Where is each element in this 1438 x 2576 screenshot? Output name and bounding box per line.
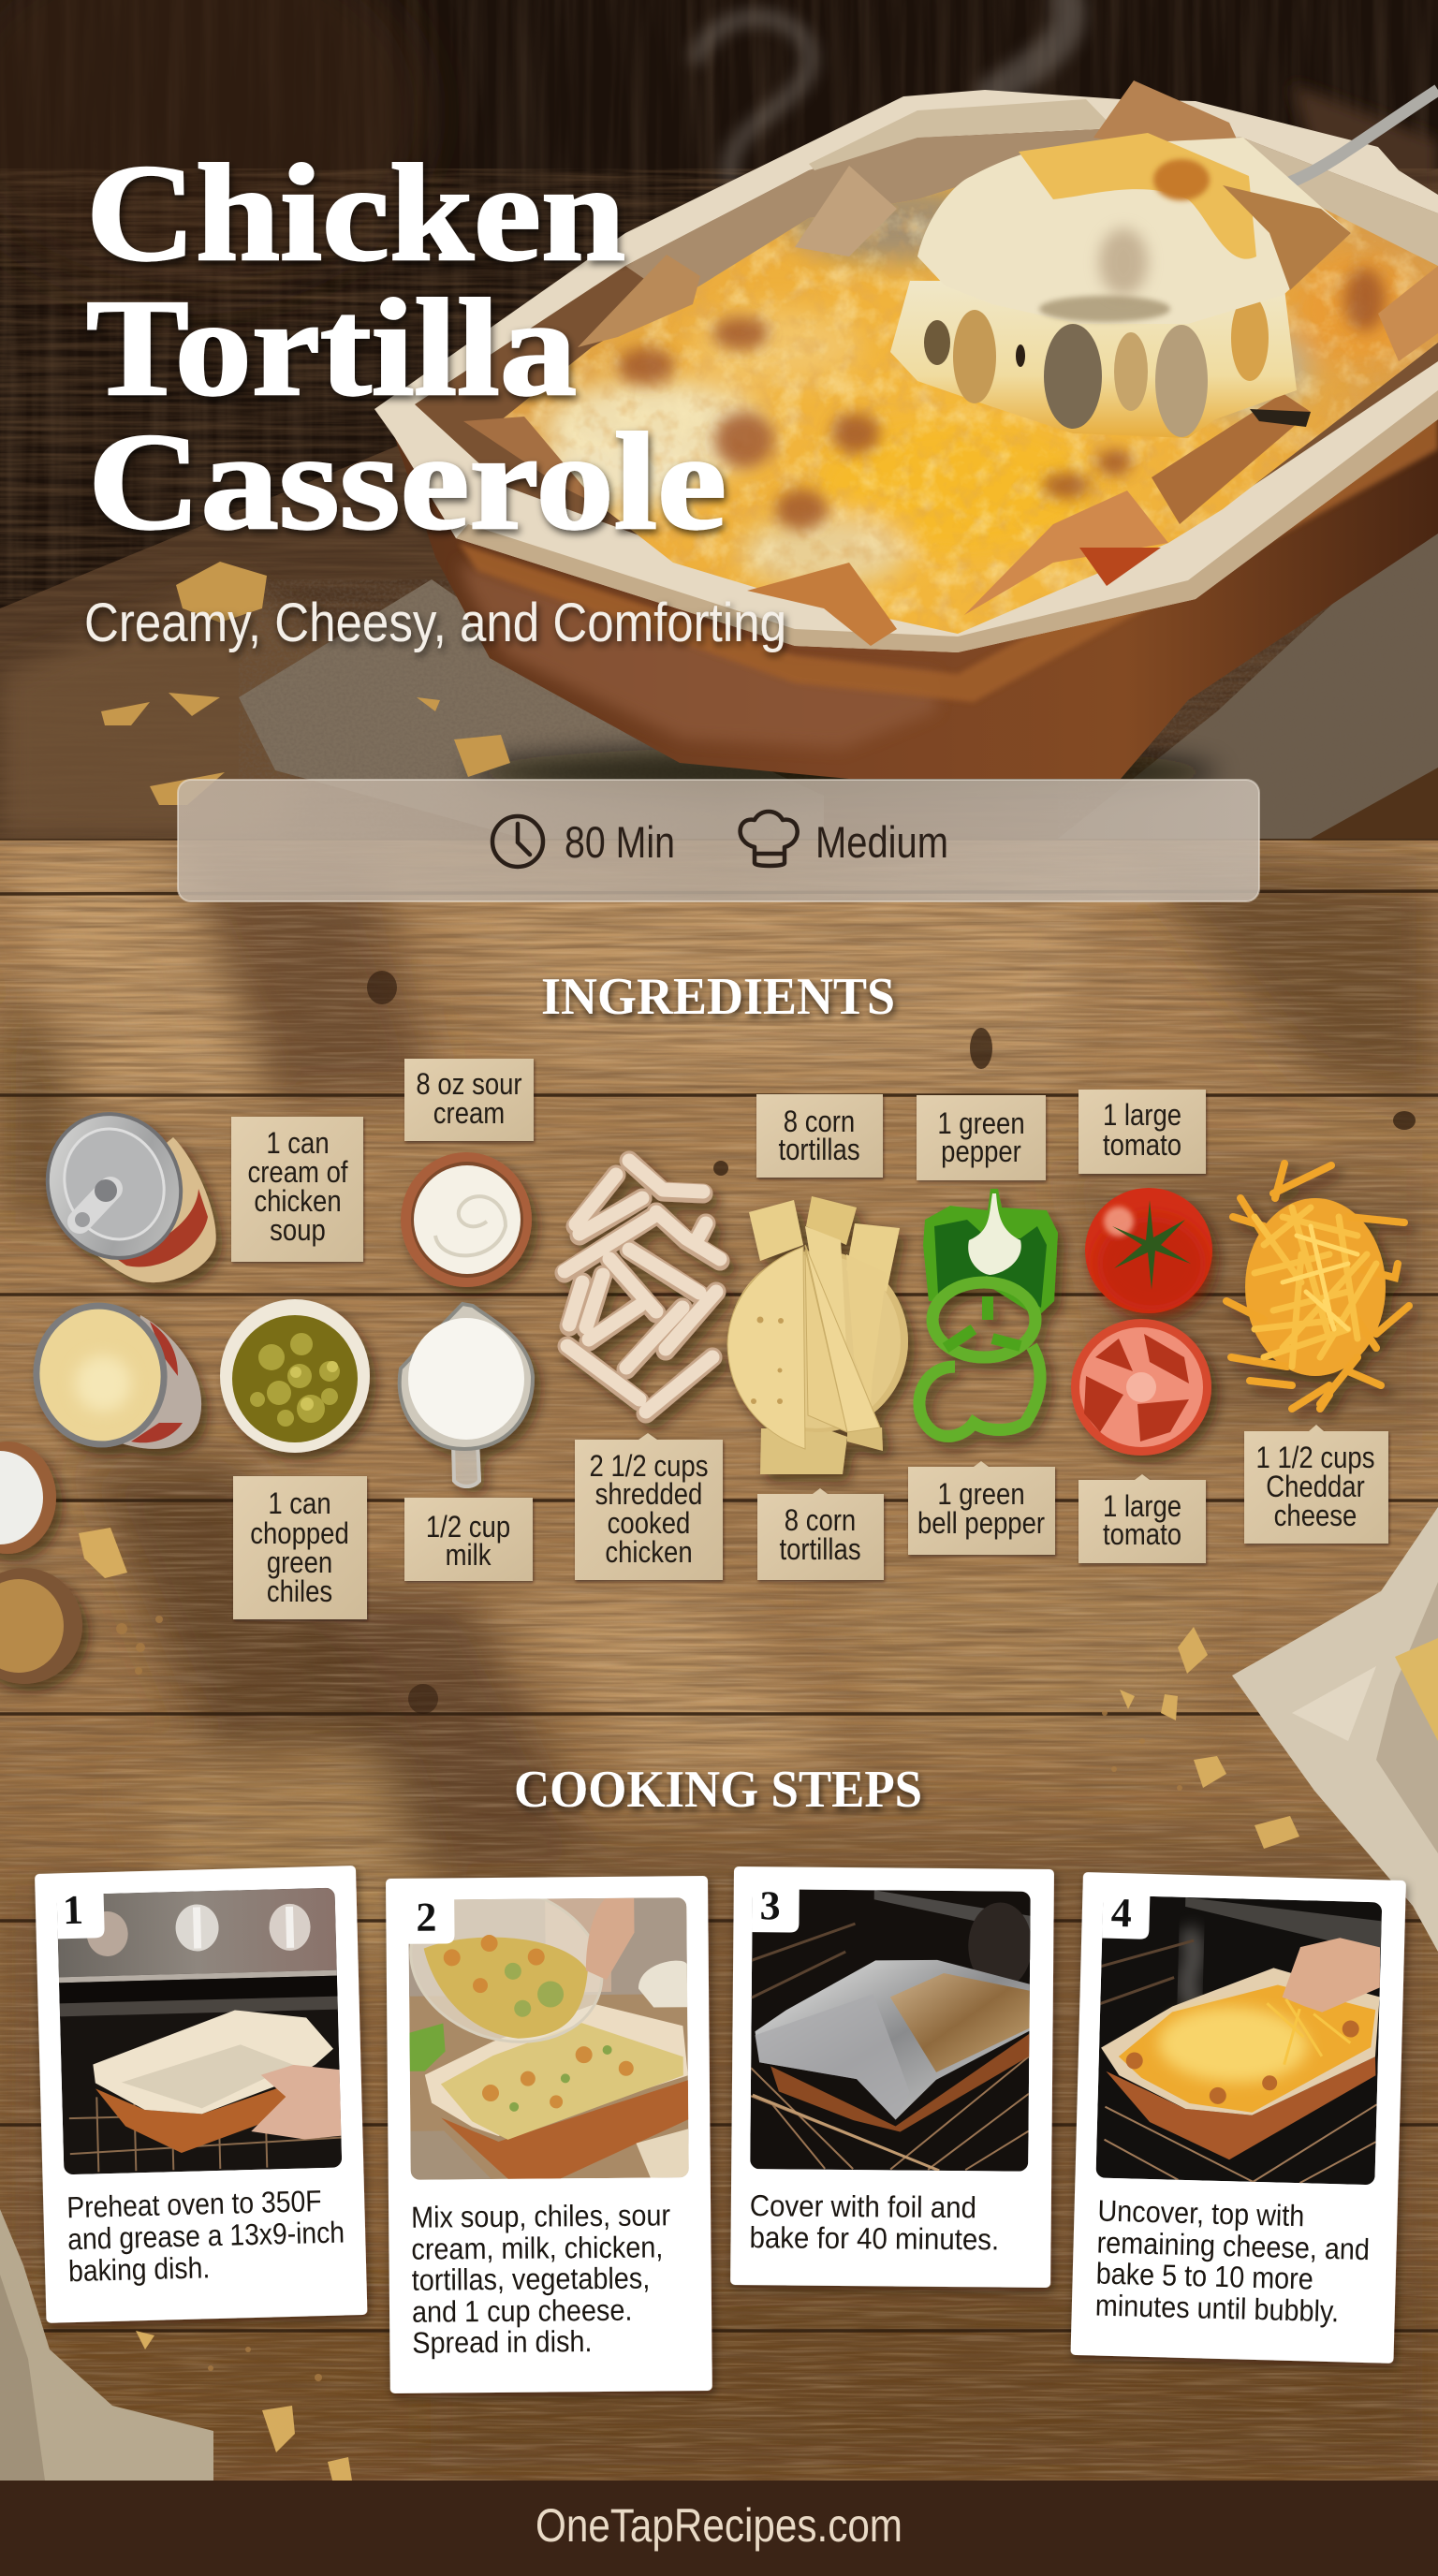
step 4 text: Uncover, top with [1097,2194,1305,2233]
step 2 text: Spread in dish. [412,2325,593,2360]
ingredient: green chiles bowl [220,1299,370,1453]
title: Tortilla [86,271,577,425]
icon: chip crumbs [79,1528,1299,2481]
step 3 photo: foil [750,1889,1033,2172]
step badge [407,1894,455,1944]
label: tomato top: 1 large [1103,1099,1181,1133]
wood table background [0,839,1438,2481]
step 4 text: minutes until bubbly. [1094,2289,1340,2329]
ingredient: open soup can [27,1297,201,1453]
label: tomato bottom: 1 large [1103,1490,1181,1524]
label: milk [404,1498,533,1581]
cheese [468,131,1438,655]
crumbs hero [101,562,510,805]
towel left [239,579,786,780]
step 4 photo: cheese topping [1095,1895,1382,2185]
step 1 text [66,2185,345,2289]
subtitle: Creamy, Cheesy, and Comforting [84,593,786,653]
label: corn tortillas bottom: tortillas [779,1533,861,1567]
label: green chiles: chiles [267,1575,332,1609]
label: green pepper top: pepper [941,1135,1021,1169]
step 4 text: bake 5 to 10 more [1095,2257,1313,2296]
ingredient: corn tortillas [727,1196,908,1474]
step 2 text: cream, milk, chicken, [411,2231,663,2266]
label: milk: milk [446,1539,492,1573]
label: green pepper top [917,1095,1046,1180]
step 2 text: tortillas, vegetables, [412,2261,650,2297]
step badge: 3 [759,1882,781,1928]
stretchy cheese strands [890,281,1297,438]
label: green chiles: green [267,1546,332,1580]
label: milk: 1/2 cup [426,1511,510,1544]
label: shredded chicken: chicken [605,1536,693,1570]
heading: ingredients: INGREDIENTS [541,968,895,1026]
step 3 text: Cover with foil and [750,2188,976,2225]
crumbs scatter [116,1616,1182,2381]
label: green bell pepper [908,1461,1055,1555]
step 1 text: baking dish. [68,2252,211,2289]
ingredient: shredded chicken [565,1161,720,1413]
label: cheddar: cheese [1274,1500,1357,1533]
label: green chiles [233,1476,367,1619]
step 1 photo: oven [57,1888,345,2174]
step badge [1102,1890,1151,1939]
step 4 text [1094,2194,1371,2329]
title: Chicken [86,137,625,290]
ingredient: sliced tomato [1071,1319,1211,1456]
hero photo: casserole [0,0,1438,839]
step 3 text: bake for 40 minutes. [749,2220,999,2257]
label: shredded chicken [575,1433,723,1580]
step badge [56,1886,105,1939]
label: shredded chicken: cooked [608,1507,690,1541]
difficulty label: Medium [815,817,948,867]
ingredient: milk cup [400,1304,533,1486]
label: sour cream: 8 oz sour [416,1068,522,1102]
label: tomato top: tomato [1103,1129,1181,1163]
label: cream of chicken soup: 1 can [266,1127,330,1161]
step 2 text [411,2199,671,2360]
label: corn tortillas top: 8 corn [784,1105,855,1139]
label: tomato top [1078,1090,1206,1174]
ingredient: green pepper [919,1189,1058,1436]
table surface [0,168,1438,839]
label: cream of chicken soup: soup [270,1214,326,1248]
glass info bar [178,780,1259,901]
label: sour cream: cream [433,1097,505,1131]
footer site name: OneTapRecipes.com [536,2499,902,2552]
label: shredded chicken: 2 1/2 cups [590,1450,708,1484]
towel right [1133,534,1438,839]
title: Casserole [88,405,726,559]
step badge: 2 [416,1895,437,1940]
step 1 text: Preheat oven to 350F [66,2186,322,2225]
ingredient: small salt and spice bowls [0,1442,82,1684]
label: corn tortillas bottom: 8 corn [785,1504,856,1538]
step card 4 [1070,1872,1406,2364]
label: green chiles: 1 can [268,1487,331,1521]
step card 2 [386,1862,712,2393]
icon: clock [492,816,543,867]
time label: 80 Min [565,817,675,867]
step badge: 1 [62,1887,84,1933]
label: corn tortillas top: tortillas [778,1134,860,1167]
label: sour cream [404,1059,534,1141]
ingredient labels [231,1059,1388,1619]
label: cheddar: Cheddar [1266,1471,1365,1504]
label: cream of chicken soup [231,1117,363,1262]
steam [697,0,1069,178]
spoon [1255,90,1438,192]
step card 3 [730,1866,1054,2288]
dish rim [374,90,1438,652]
inner wall [415,129,1438,535]
dish shadow [468,746,1217,798]
label: corn tortillas bottom [757,1488,884,1580]
towel right [1232,1507,1438,1952]
step 3 text [749,2188,1000,2257]
step 4 text: remaining cheese, and [1096,2226,1370,2266]
label: green bell pepper: bell pepper [917,1507,1045,1541]
label: cheddar: 1 1/2 cups [1256,1442,1374,1475]
ingredient: soup can closed [26,1093,216,1282]
label: corn tortillas top [756,1094,883,1178]
label: cream of chicken soup: cream of [247,1156,348,1190]
scooped cheese [917,138,1351,324]
heading: cooking steps: COOKING STEPS [514,1761,922,1819]
label: cream of chicken soup: chicken [254,1185,342,1219]
step 1 text: and grease a 13x9-inch [67,2217,345,2257]
label: tomato bottom: tomato [1103,1518,1181,1552]
label: green pepper top: 1 green [937,1107,1025,1141]
label: cheddar [1244,1425,1388,1544]
dish body [395,390,1438,779]
step 2 text: and 1 cup cheese. [412,2293,633,2329]
step 2 photo: mixing [389,1862,689,2180]
ingredient: cheddar [1226,1164,1409,1409]
step card 1 [35,1866,367,2323]
ingredient: sour cream bowl [401,1152,532,1287]
footer bar [0,2481,1438,2576]
title [86,137,726,559]
label: tomato bottom [1078,1474,1206,1563]
label: green chiles: chopped [250,1517,349,1551]
step 2 text: Mix soup, chiles, sour [411,2199,670,2234]
towel bottom left [0,2209,213,2481]
step badge [752,1882,800,1933]
step badge: 4 [1110,1890,1133,1936]
label: shredded chicken: shredded [595,1478,702,1512]
label: green bell pepper: 1 green [937,1478,1025,1512]
ingredient: whole tomato [1085,1188,1212,1313]
icon: chef hat [741,812,798,866]
tortilla chips in dish [463,166,1438,646]
